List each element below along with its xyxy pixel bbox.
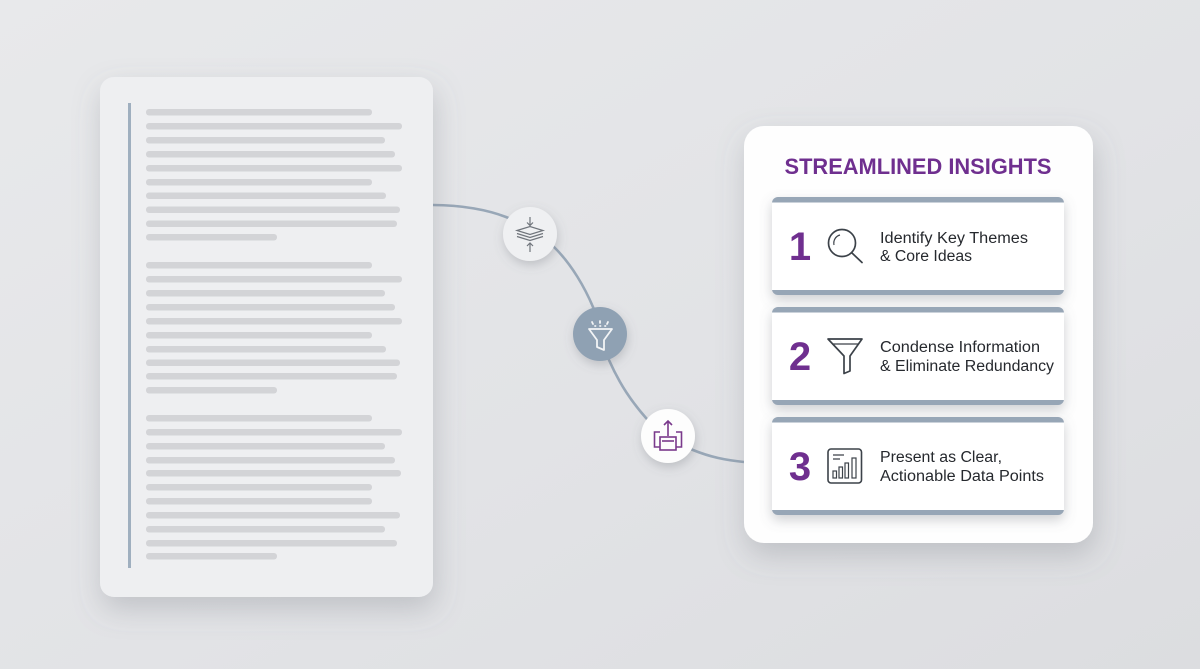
number 3: 3 [789,445,811,489]
icon: bar chart [828,449,862,483]
icon: funnel [828,339,862,374]
icon: compress layers [503,207,557,261]
panel: source document [100,77,433,597]
panel: streamlined insights [744,126,1093,543]
card 2 text: & Eliminate Redundancy [880,358,1054,375]
document margin rule [128,103,131,568]
number 2: 2 [789,335,811,379]
connector curve [433,205,744,462]
card 1: identify [772,197,1064,295]
card 1 text: Identify Key Themes [880,230,1028,247]
icon: export output [641,409,695,463]
card 1 text: & Core Ideas [880,248,972,265]
card 2: condense [772,307,1064,405]
card 3 text: Actionable Data Points [880,468,1044,485]
text placeholder lines [146,109,402,560]
card 2 text: Condense Information [880,339,1040,356]
heading: STREAMLINED INSIGHTS [784,154,1052,179]
icon: filter funnel [573,307,627,361]
card 3 text: Present as Clear, [880,449,1002,466]
card 3: present [772,417,1064,515]
icon: magnifier [828,230,862,262]
number 1: 1 [789,225,811,269]
